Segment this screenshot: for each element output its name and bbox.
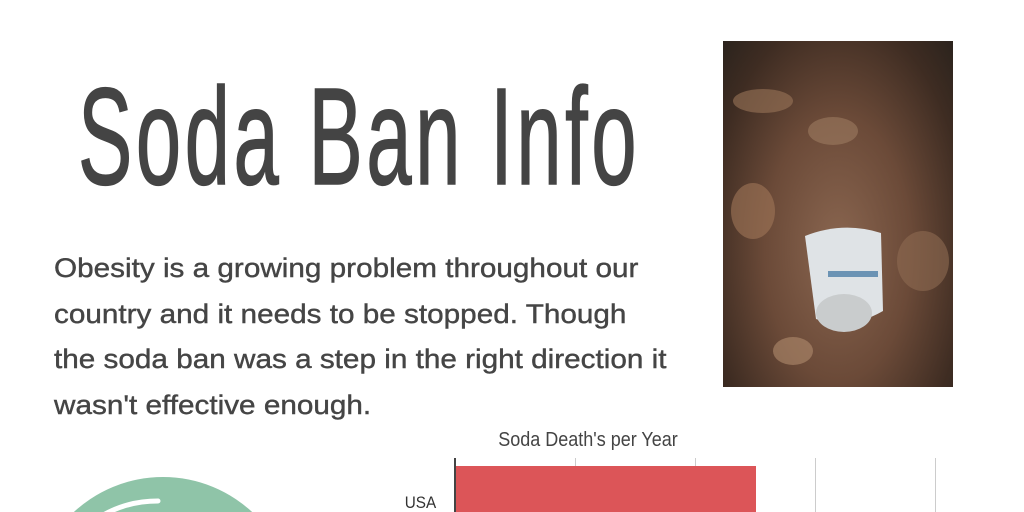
photo: crushed can in leaves — [723, 41, 953, 387]
title: Soda Ban Info — [78, 60, 640, 214]
chart title: Soda Death's per Year — [498, 429, 678, 451]
intro paragraph: the soda ban was a step in the right direction it — [54, 344, 667, 374]
label: USA: USA — [405, 493, 436, 512]
intro paragraph: wasn't effective enough. — [54, 390, 371, 420]
bar: USA — [455, 466, 756, 512]
intro paragraph: Obesity is a growing problem throughout our — [54, 253, 638, 283]
bar chart — [405, 458, 936, 512]
intro paragraph: country and it needs to be stopped. Though — [54, 298, 626, 328]
icon: green circle — [74, 477, 252, 512]
intro paragraph — [54, 253, 667, 420]
